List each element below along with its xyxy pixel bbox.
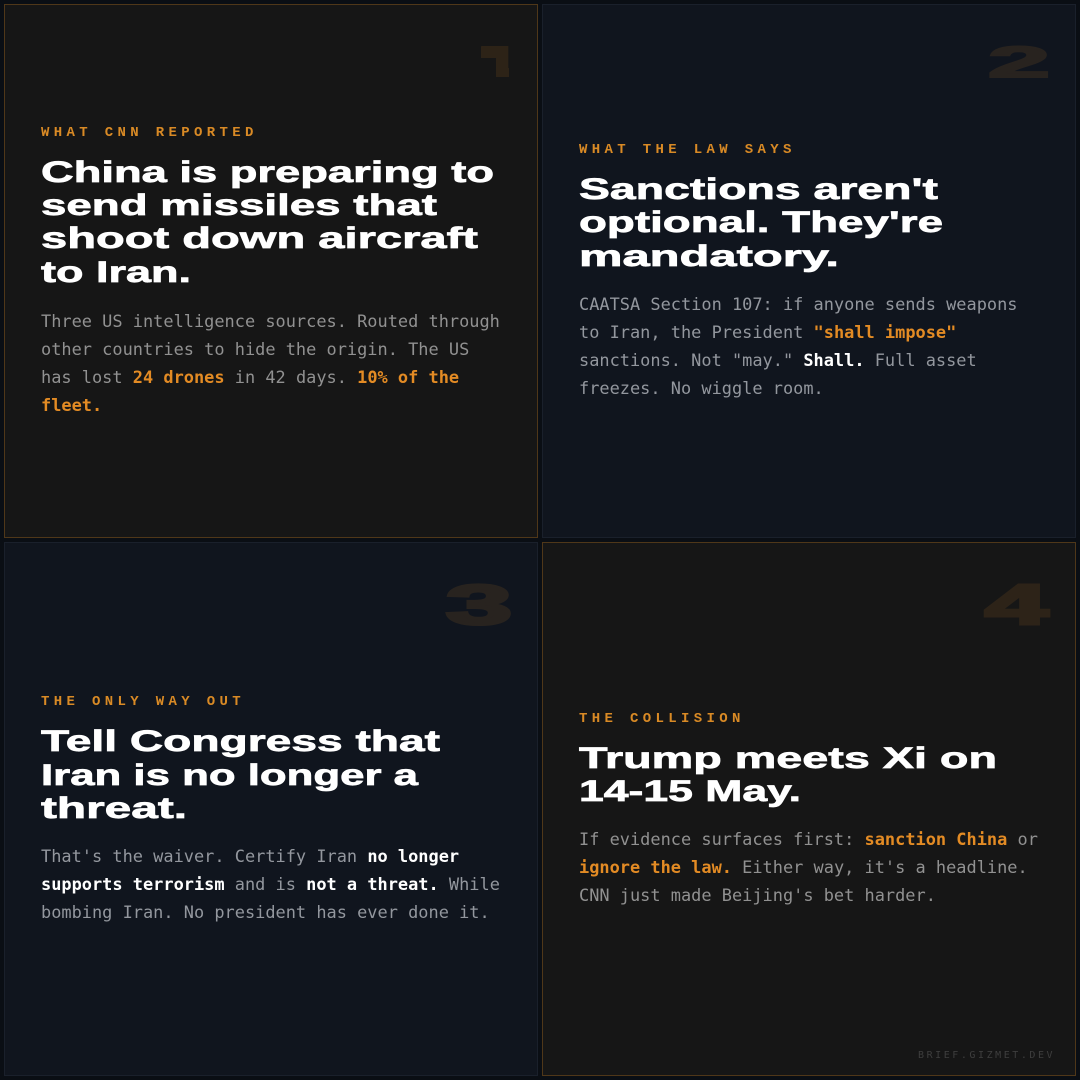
heading: Iran is no longer a (41, 759, 418, 792)
body text: That's the waiver. Certify Iran no longer (41, 846, 459, 866)
panel 4: the collision (542, 542, 1076, 1076)
panel 3: the only way out (4, 542, 538, 1076)
footer credit: BRIEF.GIZMET.DEV (918, 1050, 1055, 1061)
body text: has lost 24 drones in 42 days. 10% of the (41, 367, 459, 387)
label: WHAT CNN REPORTED (41, 125, 258, 141)
body text (579, 829, 1038, 905)
label: WHAT THE LAW SAYS (579, 142, 796, 158)
body text: bombing Iran. No president has ever done it. (41, 902, 490, 922)
body text (41, 846, 500, 922)
heading (579, 742, 997, 808)
heading (41, 156, 494, 289)
label: THE ONLY WAY OUT (41, 694, 245, 710)
heading: mandatory. (579, 240, 839, 273)
heading: send missiles that (41, 189, 437, 222)
heading: to Iran. (41, 256, 191, 289)
heading: optional. They're (579, 206, 943, 239)
body text: supports terrorism and is not a threat. While (41, 874, 500, 894)
body text: freezes. No wiggle room. (579, 378, 824, 398)
body text: ignore the law. Either way, it's a headline. (579, 857, 1028, 877)
body text: If evidence surfaces first: sanction China or (579, 829, 1038, 849)
heading: Trump meets Xi on (579, 742, 997, 775)
body text: other countries to hide the origin. The US (41, 339, 469, 359)
heading: Sanctions aren't (579, 173, 938, 206)
number 4: 4 (985, 573, 1049, 637)
body text (41, 311, 500, 415)
heading: Tell Congress that (41, 725, 440, 758)
panel 2: what the law says (542, 4, 1076, 538)
body text: CNN just made Beijing's bet harder. (579, 885, 936, 905)
label: THE COLLISION (579, 711, 745, 727)
heading: shoot down aircraft (41, 222, 478, 255)
heading: threat. (41, 792, 187, 825)
heading (579, 173, 943, 273)
number 2: 2 (988, 38, 1050, 87)
heading: 14-15 May. (579, 775, 801, 808)
number 3: 3 (446, 573, 512, 636)
body text: to Iran, the President "shall impose" (579, 322, 956, 342)
body text: Three US intelligence sources. Routed through (41, 311, 500, 331)
number 1: 1 (476, 38, 514, 87)
body text: CAATSA Section 107: if anyone sends weapons (579, 294, 1017, 314)
heading: China is preparing to (41, 156, 494, 189)
body text: fleet. (41, 395, 102, 415)
heading (41, 725, 440, 825)
panel 1: what CNN reported (4, 4, 538, 538)
body text: sanctions. Not "may." Shall. Full asset (579, 350, 977, 370)
body text (579, 294, 1017, 398)
